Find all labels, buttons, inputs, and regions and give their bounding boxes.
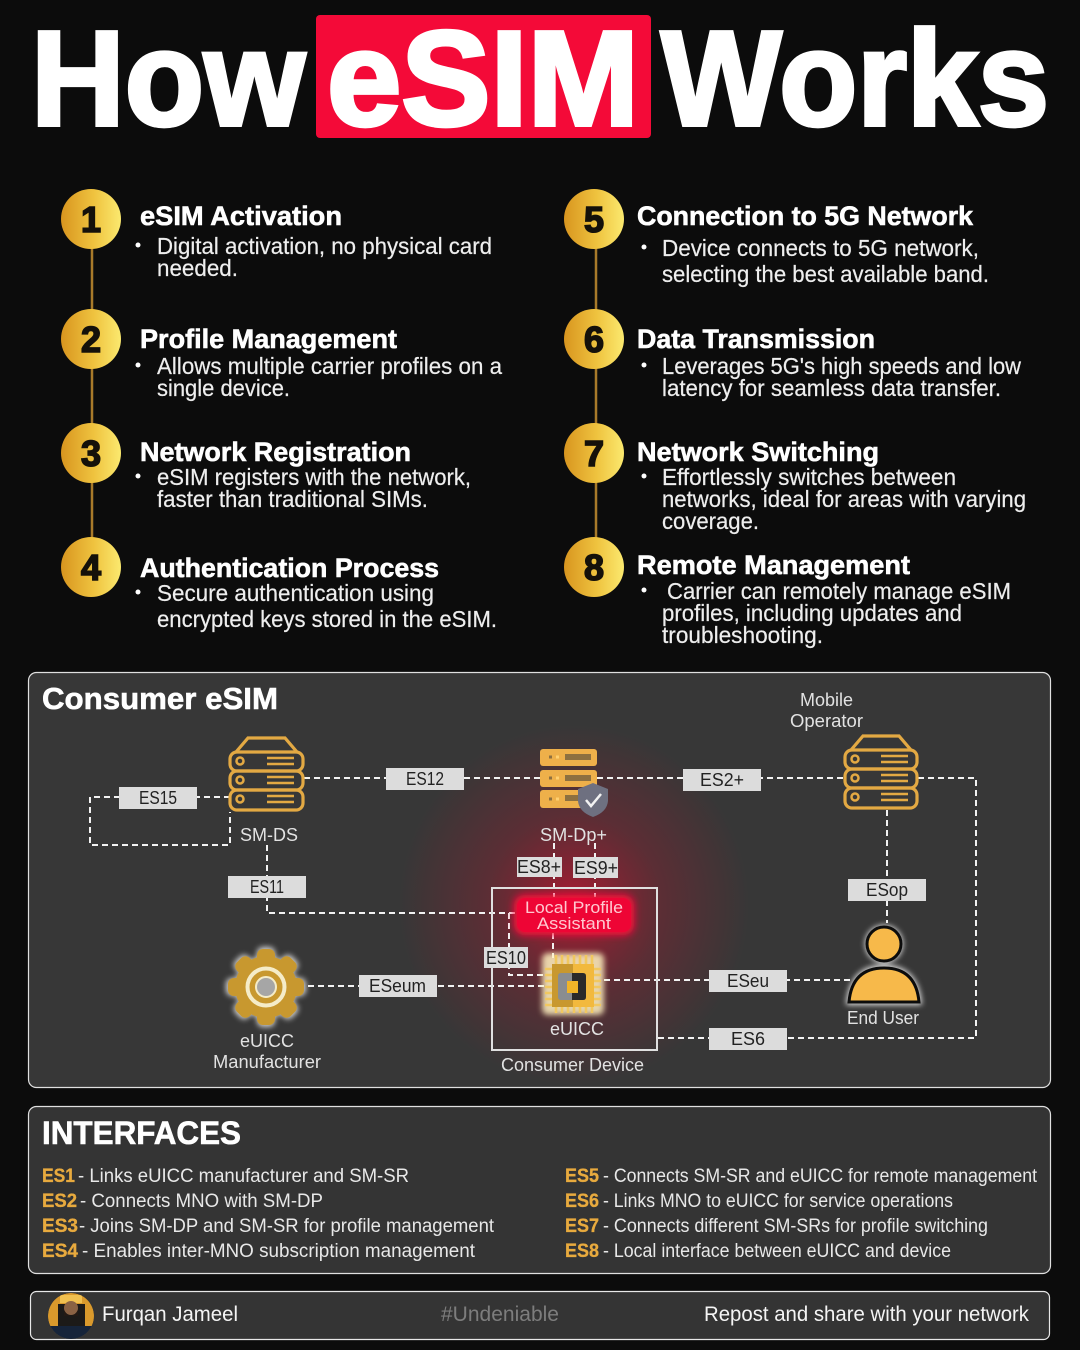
interfaces list: left column: ES4 bbox=[42, 1241, 78, 1262]
step 2: single device. bbox=[157, 375, 290, 401]
step 7: coverage. bbox=[662, 508, 759, 534]
step 3: faster than traditional SIMs. bbox=[157, 486, 428, 512]
consumer device box bbox=[492, 888, 657, 1050]
interface tags: ES9+ bbox=[574, 857, 618, 878]
icon: eUICC chip bbox=[542, 953, 604, 1015]
step 3: Network Registration bbox=[140, 437, 411, 467]
step 3: eSIM registers with the network, bbox=[157, 464, 471, 490]
node labels: SM-Dp+ bbox=[540, 824, 607, 845]
step 3 bbox=[61, 423, 471, 512]
interfaces list: left column: ES1 bbox=[42, 1166, 75, 1187]
step 6: 6 bbox=[584, 319, 604, 360]
dashed connectors bbox=[90, 778, 976, 1038]
interfaces list: right column: ES6 bbox=[565, 1191, 599, 1212]
interface tags: ES15 bbox=[139, 787, 177, 808]
interface tags bbox=[119, 768, 926, 1050]
step 5: Connection to 5G Network bbox=[637, 201, 974, 231]
title bbox=[31, 3, 1049, 154]
step 1: needed. bbox=[157, 255, 238, 281]
panel heading: Consumer eSIM bbox=[42, 681, 278, 716]
step 1 bbox=[61, 189, 492, 281]
interface tags: ES12 bbox=[406, 768, 444, 789]
step 4: Secure authentication using bbox=[157, 580, 434, 606]
node labels bbox=[213, 689, 919, 1075]
interfaces list: right column bbox=[565, 1166, 1038, 1262]
step 8: profiles, including updates and bbox=[662, 600, 962, 626]
step 7: 7 bbox=[584, 433, 604, 474]
node labels: eUICC bbox=[550, 1018, 604, 1039]
interfaces list: right column: ES8 bbox=[565, 1241, 599, 1262]
step 4 bbox=[61, 537, 497, 632]
timeline connector: left bbox=[91, 240, 93, 566]
icon: SM-DP+ server with shield bbox=[540, 749, 608, 817]
step 4: encrypted keys stored in the eSIM. bbox=[157, 606, 497, 632]
step 8 bbox=[564, 537, 1011, 648]
title: Works bbox=[661, 3, 1049, 154]
step 1: 1 bbox=[81, 199, 101, 240]
step 2 bbox=[61, 309, 502, 401]
icon: End User bbox=[846, 925, 922, 1005]
interfaces list: left column: - Links eUICC manufacturer and SM-SR bbox=[78, 1166, 409, 1187]
step 5 bbox=[564, 189, 989, 287]
interfaces list: right column: ES7 bbox=[565, 1216, 599, 1237]
node labels: Mobile bbox=[800, 689, 853, 710]
step 8: 8 bbox=[584, 547, 604, 588]
interfaces list: right column: - Local interface between eUICC and device bbox=[603, 1241, 951, 1262]
node labels: Operator bbox=[790, 710, 863, 731]
icon: Local Profile Assistant bbox=[514, 895, 634, 935]
step 4: 4 bbox=[81, 547, 101, 588]
interfaces heading: INTERFACES bbox=[42, 1115, 241, 1151]
interfaces list: left column: ES3 bbox=[42, 1216, 78, 1237]
icon: Mobile Operator server bbox=[845, 736, 917, 808]
step 5: Device connects to 5G network, bbox=[662, 235, 979, 261]
interface tags: ESop bbox=[866, 879, 908, 900]
interfaces list: left column: ES2 bbox=[42, 1191, 77, 1212]
step 7: networks, ideal for areas with varying bbox=[662, 486, 1026, 512]
interfaces list: right column: ES5 bbox=[565, 1166, 599, 1187]
interface tags: ES8+ bbox=[517, 856, 561, 877]
step 6: latency for seamless data transfer. bbox=[662, 375, 1001, 401]
icon: Local Profile Assistant: Assistant bbox=[537, 914, 611, 933]
step 4: Authentication Process bbox=[140, 553, 439, 583]
step 6 bbox=[564, 309, 1021, 401]
interfaces list: right column: - Connects SM-SR and eUICC for remote management bbox=[603, 1166, 1038, 1187]
node labels: Consumer Device bbox=[501, 1054, 644, 1075]
step 5: 5 bbox=[584, 199, 604, 240]
step 5: selecting the best available band. bbox=[662, 261, 989, 287]
icon: author avatar bbox=[48, 1293, 94, 1340]
interfaces list: right column: - Links MNO to eUICC for service operations bbox=[603, 1191, 953, 1212]
step 2: Profile Management bbox=[140, 324, 397, 354]
interfaces list: left column: - Enables inter-MNO subscription management bbox=[82, 1241, 476, 1262]
icon: Local Profile Assistant: Local Profile bbox=[525, 898, 623, 917]
step 8: Carrier can remotely manage eSIM bbox=[667, 578, 1011, 604]
interface tags: ES2+ bbox=[700, 769, 744, 790]
call to action: Repost and share with your network bbox=[704, 1302, 1029, 1326]
interfaces list: left column: - Connects MNO with SM-DP bbox=[80, 1191, 323, 1212]
interface tags: ESeum bbox=[369, 975, 426, 996]
node labels: End User bbox=[847, 1007, 919, 1028]
step 7: Effortlessly switches between bbox=[662, 464, 956, 490]
interface tags: ES6 bbox=[731, 1028, 765, 1049]
panel: Interfaces bbox=[28, 1106, 1050, 1274]
node labels: Manufacturer bbox=[213, 1051, 321, 1072]
author name: Furqan Jameel bbox=[102, 1302, 238, 1326]
step 1: eSIM Activation bbox=[140, 201, 342, 231]
node labels: SM-DS bbox=[240, 824, 298, 845]
step 2: Allows multiple carrier profiles on a bbox=[157, 353, 502, 379]
step 7: Network Switching bbox=[637, 437, 879, 467]
footer bar bbox=[30, 1292, 1050, 1340]
timeline connector: right bbox=[595, 240, 597, 566]
step 6: Leverages 5G's high speeds and low bbox=[662, 353, 1021, 379]
step 2: 2 bbox=[81, 319, 101, 360]
title highlight: eSIM: eSIM bbox=[327, 3, 639, 154]
node labels: eUICC bbox=[240, 1030, 294, 1051]
title: How bbox=[31, 3, 306, 154]
step 7 bbox=[564, 423, 1026, 534]
interface tags: ES11 bbox=[250, 876, 284, 897]
step 3: 3 bbox=[81, 433, 101, 474]
step 8: Remote Management bbox=[637, 550, 910, 580]
step 6: Data Transmission bbox=[637, 324, 875, 354]
interfaces list: left column: - Joins SM-DP and SM-SR for profile management bbox=[79, 1216, 495, 1237]
interfaces list: left column bbox=[42, 1166, 495, 1262]
interface tags: ES10 bbox=[486, 947, 526, 968]
icon: eUICC manufacturer gear bbox=[226, 947, 306, 1027]
red glow bbox=[418, 745, 729, 1064]
step 8: troubleshooting. bbox=[662, 622, 823, 648]
icon: SM-DS server bbox=[230, 738, 303, 810]
panel: Consumer eSIM diagram bbox=[28, 672, 1050, 1088]
interface tags: ESeu bbox=[727, 970, 769, 991]
hashtag: #Undeniable bbox=[441, 1302, 559, 1326]
step 1: Digital activation, no physical card bbox=[157, 233, 492, 259]
interfaces list: right column: - Connects different SM-SRs for profile switching bbox=[603, 1216, 988, 1237]
